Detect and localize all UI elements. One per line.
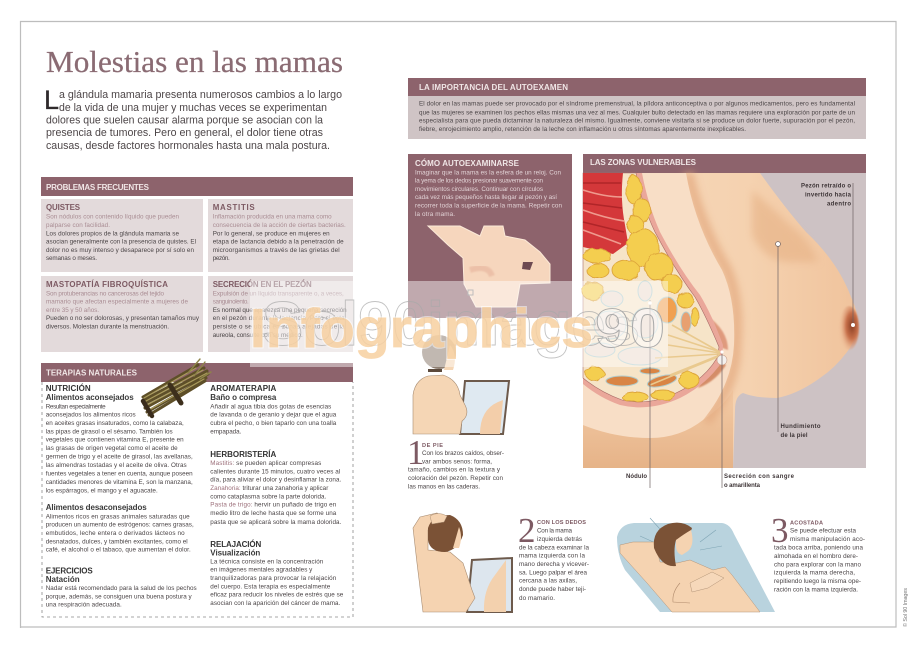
heading: autoexamen: LA IMPORTANCIA DEL AUTOEXAMEN xyxy=(419,83,568,92)
panel: problemas frecuentes xyxy=(41,177,353,352)
card: secrecion en el pezon: SECRECIÓN EN EL PEZÓN xyxy=(213,280,312,289)
card: mastitis xyxy=(208,199,353,272)
herboristeria text: HERBORISTERÍA xyxy=(210,450,277,459)
callout: pezon retraido: invertido hacia xyxy=(805,193,852,199)
illustration: step 3 lying down xyxy=(617,518,775,612)
nutricion text: Alimentos aconsejados xyxy=(46,393,134,402)
panel: las zonas vulnerables xyxy=(582,154,866,489)
callout: secrecion: Secreción con sangre xyxy=(724,474,795,480)
card: mastitis: pezón. xyxy=(213,255,230,262)
como autoexaminarse text xyxy=(415,169,562,218)
callout: pezon retraido xyxy=(801,183,855,327)
nutricion text: germen de trigo y el aceite de girasol, las avellanas, xyxy=(46,454,193,460)
card: quistes: Los dolores propios de la glándula mamaria se xyxy=(46,230,179,237)
nutricion text: los espárragos, el mango y el aguacate. xyxy=(46,487,158,494)
skin silhouette xyxy=(583,173,858,468)
ejercicios text xyxy=(46,566,197,609)
heading: autoexamen xyxy=(408,78,866,96)
card: secrecion en el pezon: en el pezón durante la lactancia. Pero si ésta xyxy=(213,315,345,322)
herboristeria text: día, para aliviar el dolor y desinflamar la zona. xyxy=(210,477,342,484)
nutricion text: Alimentos ricos en grasas animales saturadas que xyxy=(46,513,190,520)
card: quistes: Son nódulos con contenido líquido que pueden xyxy=(46,214,179,221)
como autoexaminarse text: la otra mama. xyxy=(415,211,455,218)
card: mastopatia fibroquistica: MASTOPATÍA FIBROQUÍSTICA xyxy=(46,280,168,289)
step 3 text: tada boca arriba, poniendo una xyxy=(774,544,863,551)
numeral 2: 2 xyxy=(518,511,536,550)
callout: pezon retraido: adentro xyxy=(827,201,851,207)
nipple discharge xyxy=(717,355,727,365)
step 2 text: Con la mama xyxy=(537,528,572,535)
aromaterapia text: Añadir al agua tibia dos gotas de esencias xyxy=(210,403,331,410)
fat lobules xyxy=(582,176,699,402)
step 2 text: mama izquierda con la xyxy=(519,553,585,560)
nutricion text: Alimentos desaconsejados xyxy=(46,503,147,512)
heading: problemas frecuentes: PROBLEMAS FRECUENTES xyxy=(46,183,150,192)
heading: problemas frecuentes xyxy=(41,177,353,196)
step 3 text: repitiendo luego la misma ope- xyxy=(774,578,861,585)
card: quistes: QUISTES xyxy=(46,203,80,212)
nutricion text: embutidos, leche entera o derivados lácteos no xyxy=(46,530,185,537)
nutricion text: cantidades menores de vitamina E, son la manzana, xyxy=(46,479,193,486)
title: Molestias en las mamas xyxy=(46,45,343,79)
heading: zonas vulnerables: LAS ZONAS VULNERABLES xyxy=(590,158,697,167)
nutricion text: fuentes vegetales a tener en cuenta, aunque poseen xyxy=(46,470,193,477)
herboristeria text: medio litro de leche hasta que se forme una xyxy=(210,510,337,517)
milk lobes xyxy=(585,281,691,389)
ejercicios text: EJERCICIOS xyxy=(46,566,93,576)
step 1 text: tamaño, cambios en la textura y xyxy=(408,467,501,474)
card: mastopatia fibroquistica: Pueden o no ser dolorosas, y presentan tamaños muy xyxy=(46,315,200,322)
callout: pezon retraido: Pezón retraído o xyxy=(801,183,851,189)
card: secrecion en el pezon: Expulsión de un líquido transparente o, a veces, xyxy=(213,290,344,297)
callout: hundimiento de la piel: de la piel xyxy=(780,433,808,439)
step 3 text: misma manipulación aco- xyxy=(790,536,865,543)
card: quistes: semanas o meses. xyxy=(46,255,97,262)
step 2 text: sa. Luego palpar el área xyxy=(519,569,587,576)
drop cap: L xyxy=(44,85,59,115)
aromaterapia text: AROMATERAPIA xyxy=(210,384,277,393)
relajacion text xyxy=(210,540,344,607)
step 2 text: izquierda detrás xyxy=(537,536,582,543)
aromaterapia text: empapada. xyxy=(210,428,242,435)
credit: © Sol 90 Images xyxy=(902,588,909,627)
step 3 text: ración con la mama izquierda. xyxy=(774,587,858,594)
callout: hundimiento de la piel xyxy=(776,242,821,439)
heading: terapias naturales: TERAPIAS NATURALES xyxy=(46,368,138,378)
panel: terapias naturales xyxy=(41,359,353,617)
card: mastitis: etapa de lactancia debido a la penetración de xyxy=(213,239,344,246)
illustration: step 2 arm raised at mirror xyxy=(413,513,512,612)
front breast lobe xyxy=(583,173,734,438)
callout: nodulo xyxy=(626,300,652,488)
callout: secrecion xyxy=(720,350,795,489)
step 1 text: las manos en las caderas. xyxy=(408,483,480,490)
areola left xyxy=(706,315,728,350)
relajacion text: del cuerpo. Esta terapia es especialmente xyxy=(210,583,331,590)
milk ducts xyxy=(650,325,720,385)
ejercicios text: una respiración adecuada. xyxy=(46,602,122,609)
nutricion text: las pipas de girasol o el sésamo. También los xyxy=(46,428,173,435)
callout: hundimiento de la piel: Hundimiento xyxy=(780,424,821,430)
heading: zonas vulnerables xyxy=(583,154,866,173)
intro text block: a glándula mamaria presenta numerosos cambios a lo largo xyxy=(59,89,342,101)
illustration: torso with clock xyxy=(428,226,550,307)
nutricion text: aconsejados los alimentos ricos xyxy=(46,412,136,419)
card: quistes: palparse con facilidad. xyxy=(46,222,110,229)
relajacion text: asocian con la aparición del cáncer de mama. xyxy=(210,600,341,607)
step 1 text: coloración del pezón. Repetir con xyxy=(408,475,503,482)
card: secrecion en el pezon xyxy=(208,276,353,352)
card: mastopatia fibroquistica xyxy=(41,276,203,352)
lower torso xyxy=(583,390,733,468)
step 1 text: Con los brazos caídos, obser- xyxy=(422,450,504,457)
ejercicios text: porque, además, se consiguen una buena postura y xyxy=(46,593,193,600)
relajacion text: en imágenes mentales agradables y xyxy=(210,567,313,574)
step 2 text: mano derecha y vicever- xyxy=(519,561,589,568)
breast xyxy=(673,583,690,603)
body xyxy=(620,542,760,612)
card: mastopatia fibroquistica: diversos. Molestan durante la menstruación. xyxy=(46,324,169,330)
aromaterapia text: Baño o compresa xyxy=(210,393,277,402)
nutricion text: las almendras tostadas y el aceite de oliva. Otras xyxy=(46,462,187,469)
nutricion text: NUTRICIÓN xyxy=(46,384,91,393)
numeral 1: 1 xyxy=(407,433,424,472)
step 2 text: de la cabeza examinar la xyxy=(519,544,589,551)
watermark: Sol90images xyxy=(262,290,640,359)
step 2 text: cercana a las axilas, xyxy=(519,578,577,585)
numeral 3: 3 xyxy=(771,511,788,550)
card: secrecion en el pezon: sanguinolento. xyxy=(213,299,249,306)
callout: nodulo: Nódulo xyxy=(626,474,647,480)
herboristeria text: Pasta de trigo: hervir un puñado de trigo en xyxy=(210,502,337,509)
hair xyxy=(654,523,692,566)
relajacion text: RELAJACIÓN xyxy=(210,540,262,549)
card: quistes: asocian generalmente con la presencia de quistes. El xyxy=(46,239,196,246)
areola right xyxy=(839,306,859,350)
face xyxy=(676,530,692,555)
autoexamen text: El dolor en las mamas puede ser provocado por el síndrome premenstrual, la píldora anticonceptiva o por algunos medicamentos, pero es fundamental xyxy=(419,101,855,108)
como autoexaminarse text: la yema de los dedos presionar suavemente con xyxy=(415,178,543,185)
step 2 text: donde puede haber teji- xyxy=(519,586,586,593)
card: mastitis: Por lo general, se produce en mujeres en xyxy=(213,230,330,237)
step 3 text: cho para explorar con la mano xyxy=(774,561,861,568)
nutricion text: las grasas de origen vegetal como el aceite de xyxy=(46,445,178,452)
step 3 text: izquierda la mama derecha, xyxy=(774,570,855,577)
heading: terapias naturales xyxy=(41,363,353,382)
card: mastitis: consecuencia de la acción de ciertas bacterias. xyxy=(213,222,346,229)
watermark: Infographics xyxy=(250,297,593,359)
fold shading xyxy=(688,173,737,422)
card: mastopatia fibroquistica: Son protuberancias no cancerosas del tejido xyxy=(46,290,164,297)
herboristeria text: Zanahoria: triturar una zanahoria y aplicar xyxy=(210,485,328,492)
relajacion text: La técnica consiste en la concentración xyxy=(210,558,324,565)
step 3 text: almohada en el hombro dere- xyxy=(774,553,858,560)
nutricion text: producen un aumento de estrógenos: carnes grasas, xyxy=(46,522,194,529)
panel: como autoexaminarse xyxy=(408,154,572,318)
panel: la importancia del autoexamen xyxy=(408,78,866,139)
herboristeria text: calientes durante 15 minutos, cuatro veces al xyxy=(210,468,340,475)
nutricion text xyxy=(46,384,194,554)
card: quistes: dolor no es muy intenso y desaparece por sí solo en xyxy=(46,247,194,254)
card: mastitis: MASTITIS xyxy=(213,203,255,212)
muscle xyxy=(583,173,628,254)
como autoexaminarse text: cada vez más pequeños hasta llegar al pezón y así xyxy=(415,194,557,201)
como autoexaminarse text: recorrer toda la superficie de la mama. Repetir con xyxy=(415,202,562,210)
relajacion text: eficaz para reducir los niveles de estrés que se xyxy=(210,592,344,599)
illustration: breast anatomy xyxy=(582,173,859,468)
relajacion text: Visualización xyxy=(210,548,260,558)
watermark: Infographics xyxy=(250,297,593,359)
aromaterapia text: cubra el pecho, o bien taparlo con una toalla xyxy=(210,420,337,427)
skin dimples xyxy=(752,190,818,262)
dissected section xyxy=(583,173,723,407)
step 2 text xyxy=(518,511,589,602)
intro text block: dolores que suelen causar alarma porque se asocian con la xyxy=(46,114,324,126)
nutricion text: desnatados, dulces, y también excitantes, como el xyxy=(46,538,188,545)
card: mastitis: Inflamación producida en una mama como xyxy=(213,214,332,221)
autoexamen text: especialista para que pueda dictaminar la naturaleza del mismo. Igualmente, conviene visitarla si se produce un dolor fuerte, supuración por el pezón, xyxy=(419,118,855,125)
card: mastopatia fibroquistica: mamario que afectan especialmente a mujeres de xyxy=(46,299,188,306)
relajacion text: tranquilizadoras para provocar la relajación xyxy=(210,575,337,582)
autoexamen text: fiebre, enrojecimiento amplio, retención de la leche con inflamación u otros síntomas aparentemente inexplicables. xyxy=(419,126,746,133)
intro text block xyxy=(44,85,342,152)
card: secrecion en el pezon: Es normal que aparezca una pequeña secreción xyxy=(213,307,347,314)
herboristeria text: pasta que se aplicará sobre la mama dolorida. xyxy=(210,519,342,526)
nutricion text: vegetales que contienen vitamina E, presente en xyxy=(46,437,184,444)
ejercicios text: Nadar está recomendado para la salud de los pechos xyxy=(46,585,197,592)
step 3 text: ACOSTADA xyxy=(790,520,823,526)
nutricion text: Resultan especialmente xyxy=(46,403,106,410)
mirror xyxy=(460,381,509,434)
como autoexaminarse text: Imaginar que la mama es la esfera de un reloj. Con xyxy=(415,169,561,176)
intro text block: causas, desde factores hormonales hasta una mala postura. xyxy=(46,140,330,152)
card: secrecion en el pezon: persiste o se ubica en zonas alejadas de la xyxy=(213,324,345,330)
intro text block: presencia de tumores. Pero en general, el dolor tiene otras xyxy=(46,127,323,139)
watermark: 90 xyxy=(595,297,665,359)
step 1 text: var ambos senos: forma, xyxy=(422,458,492,465)
illustration: step 1 standing at mirror xyxy=(413,335,509,434)
callout: secrecion: o amarillenta xyxy=(724,483,761,489)
step 1 text xyxy=(407,433,504,490)
card: mastitis: microorganismos a través de las grietas del xyxy=(213,247,340,254)
ejercicios text: Natación xyxy=(46,575,80,584)
mirror xyxy=(467,558,512,612)
card: mastopatia fibroquistica: entre 35 y 50 años. xyxy=(46,307,99,314)
nutricion text: en aceites grasas insaturados, como la calabaza, xyxy=(46,420,184,427)
card: secrecion en el pezon: aureola, consulte con su médico. xyxy=(213,332,303,339)
autoexamen text xyxy=(419,101,855,133)
step 3 text xyxy=(771,511,865,594)
aromaterapia text: de lavanda o de geranio y dejar que el agua xyxy=(210,412,337,419)
pillow xyxy=(617,523,775,612)
card: quistes xyxy=(41,199,203,272)
step 2 text: do mamario. xyxy=(519,595,555,602)
herboristeria text xyxy=(210,450,342,526)
como autoexaminarse text: movimientos circulares. Continuar con círculos xyxy=(415,186,543,193)
step 1 text: DE PIE xyxy=(422,443,443,449)
aromaterapia text xyxy=(210,384,337,435)
herboristeria text: Mastitis: se pueden aplicar compresas xyxy=(210,460,321,467)
hand xyxy=(690,572,724,592)
autoexamen text: que las mujeres se examinen los pechos ellas mismas una vez al mes. Cualquier bulto detectado en las mamas requiere una exploración por parte de un xyxy=(419,109,855,116)
icon: asparagus bundle xyxy=(143,359,211,416)
step 2 text: CON LOS DEDOS xyxy=(537,520,586,526)
herboristeria text: como cataplasma sobre la parte dolorida. xyxy=(210,493,327,500)
intro text block: de la vida de una mujer y muchas veces se experimentan xyxy=(59,102,327,114)
step 3 text: Se puede efectuar esta xyxy=(790,528,856,535)
heading: como autoexaminarse: CÓMO AUTOEXAMINARSE xyxy=(415,159,520,168)
nutricion text: café, el alcohol o el tabaco, que aumentan el dolor. xyxy=(46,547,191,554)
